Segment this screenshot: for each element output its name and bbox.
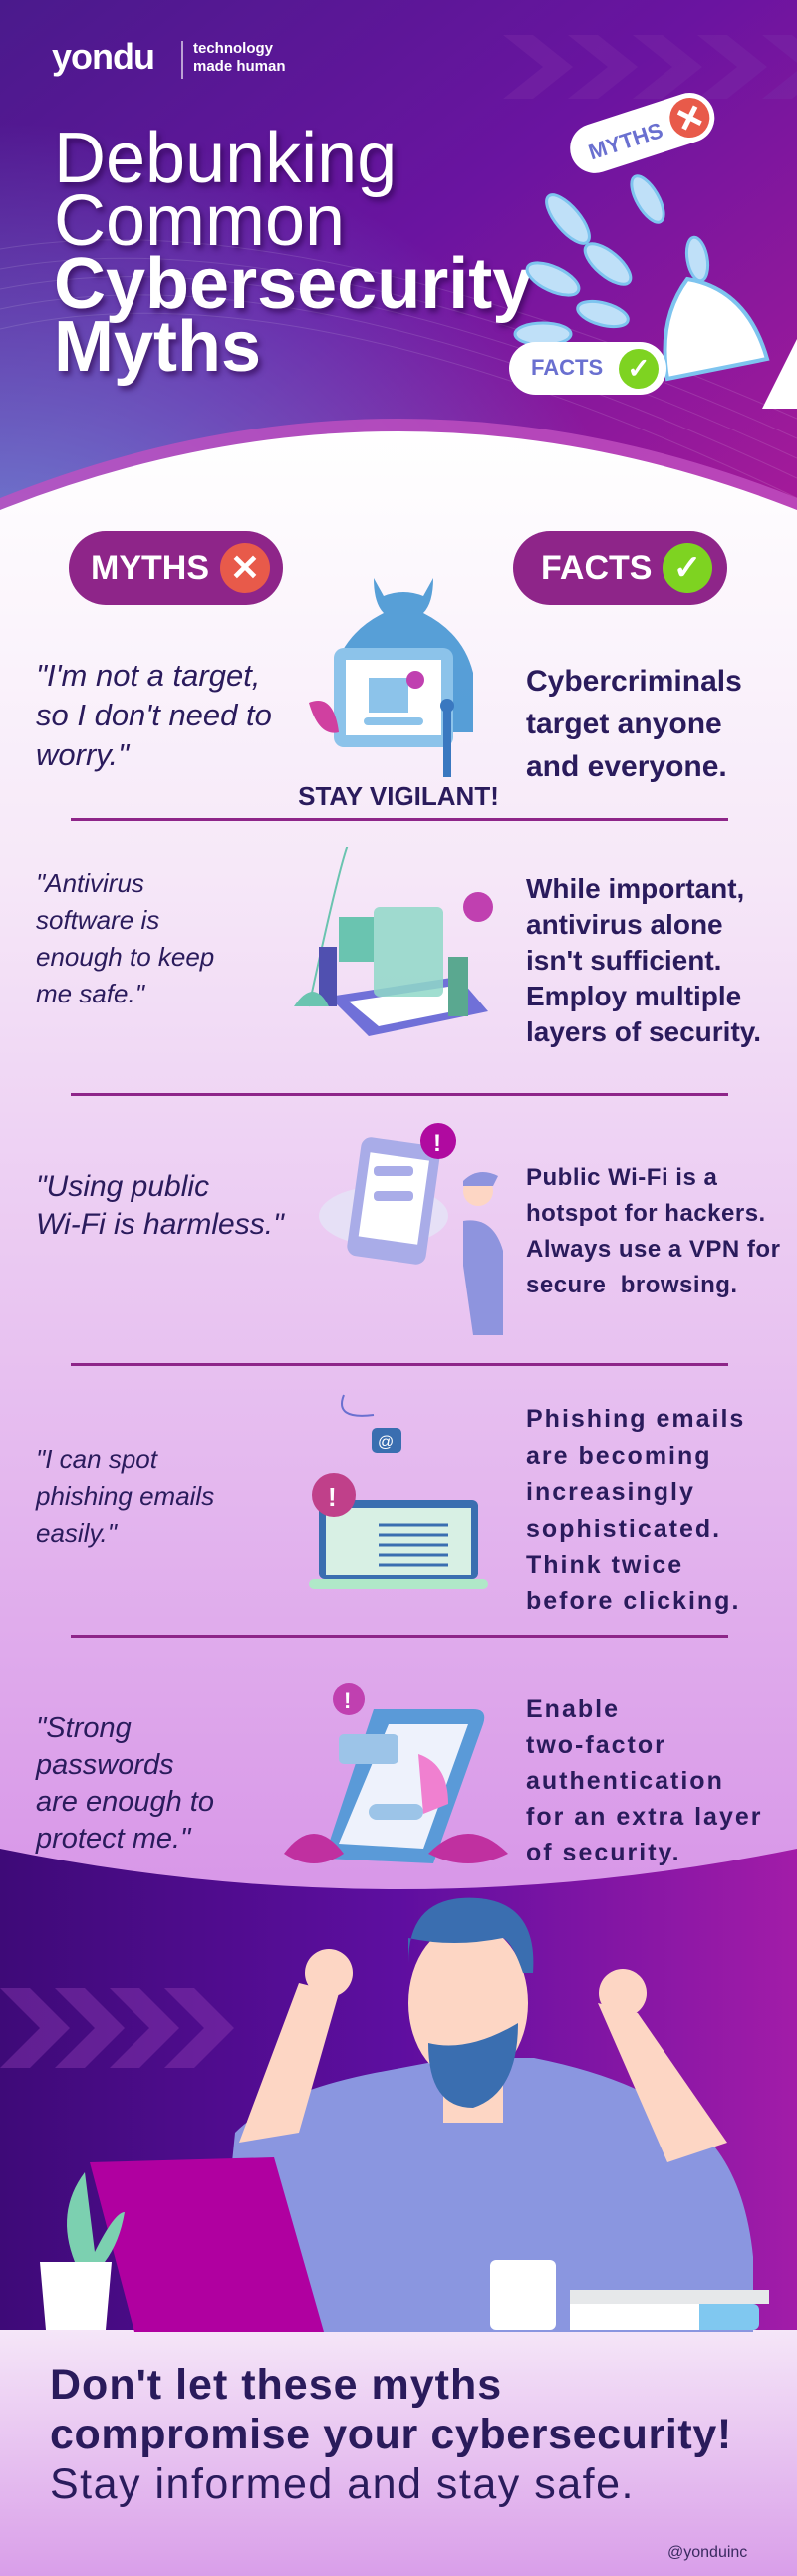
books <box>570 2290 769 2304</box>
row 2 fact: antivirus alone <box>526 909 723 940</box>
row 1 fact: target anyone <box>526 708 722 740</box>
left arm <box>239 1983 339 2143</box>
row 2 fact <box>526 873 761 1047</box>
row 5 fact: of security. <box>526 1839 681 1866</box>
illustration 1: hacker and screen <box>309 578 473 777</box>
row 5 myth <box>35 1712 214 1855</box>
illustration 4: laptop with email <box>309 1395 488 1589</box>
row 4 fact: increasingly <box>526 1478 695 1506</box>
row 1 fact <box>526 665 742 783</box>
row 5 myth: are enough to <box>36 1786 214 1818</box>
footer text: Don't let these myths <box>50 2361 502 2409</box>
myths tag <box>564 87 721 179</box>
right arm <box>598 2003 727 2162</box>
pill: myths: ✕ <box>230 547 260 588</box>
row 2 myth: me safe." <box>36 979 144 1008</box>
head <box>408 1923 528 2083</box>
row 4 fact: Phishing emails <box>526 1405 745 1433</box>
bottom illustration: celebrating man <box>40 1897 769 2332</box>
row 1 myth <box>36 658 272 772</box>
handle: @yonduinc <box>667 2544 747 2561</box>
header illustration: robot hand with tags <box>514 93 797 409</box>
row 5 myth: protect me." <box>36 1823 190 1855</box>
row 5 fact: authentication <box>526 1767 724 1795</box>
row 4 fact: are becoming <box>526 1441 712 1469</box>
row 2 fact: layers of security. <box>526 1016 761 1047</box>
pill: facts <box>513 531 727 605</box>
row 3 fact: Public Wi-Fi is a <box>526 1164 717 1191</box>
title: Myths <box>54 307 261 387</box>
row 4 myth: easily." <box>36 1518 117 1548</box>
title: Cybersecurity <box>54 244 532 324</box>
row 4 fact: sophisticated. <box>526 1515 721 1543</box>
row 3 myth <box>36 1170 285 1241</box>
logo: yondu <box>52 36 154 77</box>
mug <box>490 2260 556 2330</box>
row 4 fact <box>526 1405 745 1614</box>
row 5 myth: "Strong <box>36 1712 132 1744</box>
row 4 fact: Think twice <box>526 1551 683 1578</box>
row 2 fact: While important, <box>526 873 744 904</box>
illustration 3: phone and man <box>319 1123 503 1335</box>
row 4 myth <box>35 1444 214 1548</box>
row 4 myth: phishing emails <box>36 1481 214 1511</box>
pill: facts: ✓ <box>673 549 701 587</box>
neck <box>443 2063 503 2123</box>
stay vigilant: STAY VIGILANT! <box>298 781 499 811</box>
row 3 myth: Wi-Fi is harmless." <box>36 1208 284 1241</box>
illustration 4: laptop with email: ! <box>328 1482 337 1512</box>
row 5 myth: passwords <box>36 1749 174 1781</box>
illustration 2: phishing hook with phone <box>294 847 493 1036</box>
row 3 myth: "Using public <box>36 1170 209 1203</box>
pill: myths: MYTHS <box>91 549 209 587</box>
shirt <box>225 2058 753 2352</box>
row 3 fact <box>526 1164 780 1298</box>
row 4 myth: "I can spot <box>36 1444 157 1474</box>
title: Common <box>54 181 345 261</box>
logo: made human <box>193 58 286 75</box>
logo <box>52 36 286 79</box>
footer text: compromise your cybersecurity! <box>50 2411 732 2458</box>
title <box>54 119 534 393</box>
row 2 fact: isn't sufficient. <box>526 945 721 976</box>
footer text <box>50 2361 732 2508</box>
row 2 fact: Employ multiple <box>526 981 741 1011</box>
row 5 fact: two-factor <box>526 1731 666 1759</box>
row 1 myth: "I'm not a target, <box>36 658 260 693</box>
title: Debunking <box>54 119 397 198</box>
illustration 3: phone and man: ! <box>433 1130 441 1157</box>
row 1 fact: and everyone. <box>526 750 727 783</box>
row 2 myth: "Antivirus <box>36 868 144 898</box>
row 5 fact: for an extra layer <box>526 1803 763 1831</box>
row 3 fact: secure browsing. <box>526 1272 738 1298</box>
row 2 myth: enough to keep <box>36 942 214 972</box>
row 2 myth: software is <box>36 905 159 935</box>
illustration 5: phone with buy button <box>284 1683 508 1863</box>
row 3 fact: hotspot for hackers. <box>526 1200 766 1227</box>
myths tag: MYTHS <box>585 118 665 164</box>
facts tag: FACTS <box>531 355 603 380</box>
pill: facts: FACTS <box>541 549 652 587</box>
pill: myths <box>69 531 283 605</box>
row 1 myth: so I don't need to <box>36 698 272 732</box>
facts tag: ✓ <box>627 353 651 384</box>
logo: technology <box>193 40 273 57</box>
footer text: Stay informed and stay safe. <box>50 2460 635 2508</box>
row 3 fact: Always use a VPN for <box>526 1236 780 1263</box>
row 5 fact <box>526 1695 763 1866</box>
row 1 myth: worry." <box>36 737 129 772</box>
row 4 fact: before clicking. <box>526 1586 740 1614</box>
facts tag <box>509 342 666 395</box>
laptop <box>90 2157 324 2332</box>
row 5 fact: Enable <box>526 1695 620 1723</box>
row 2 myth <box>36 868 214 1008</box>
illustration 5: phone with buy button: ! <box>344 1688 351 1713</box>
illustration 4: laptop with email: @ <box>378 1434 394 1451</box>
row 1 fact: Cybercriminals <box>526 665 742 698</box>
plant <box>67 2172 125 2262</box>
